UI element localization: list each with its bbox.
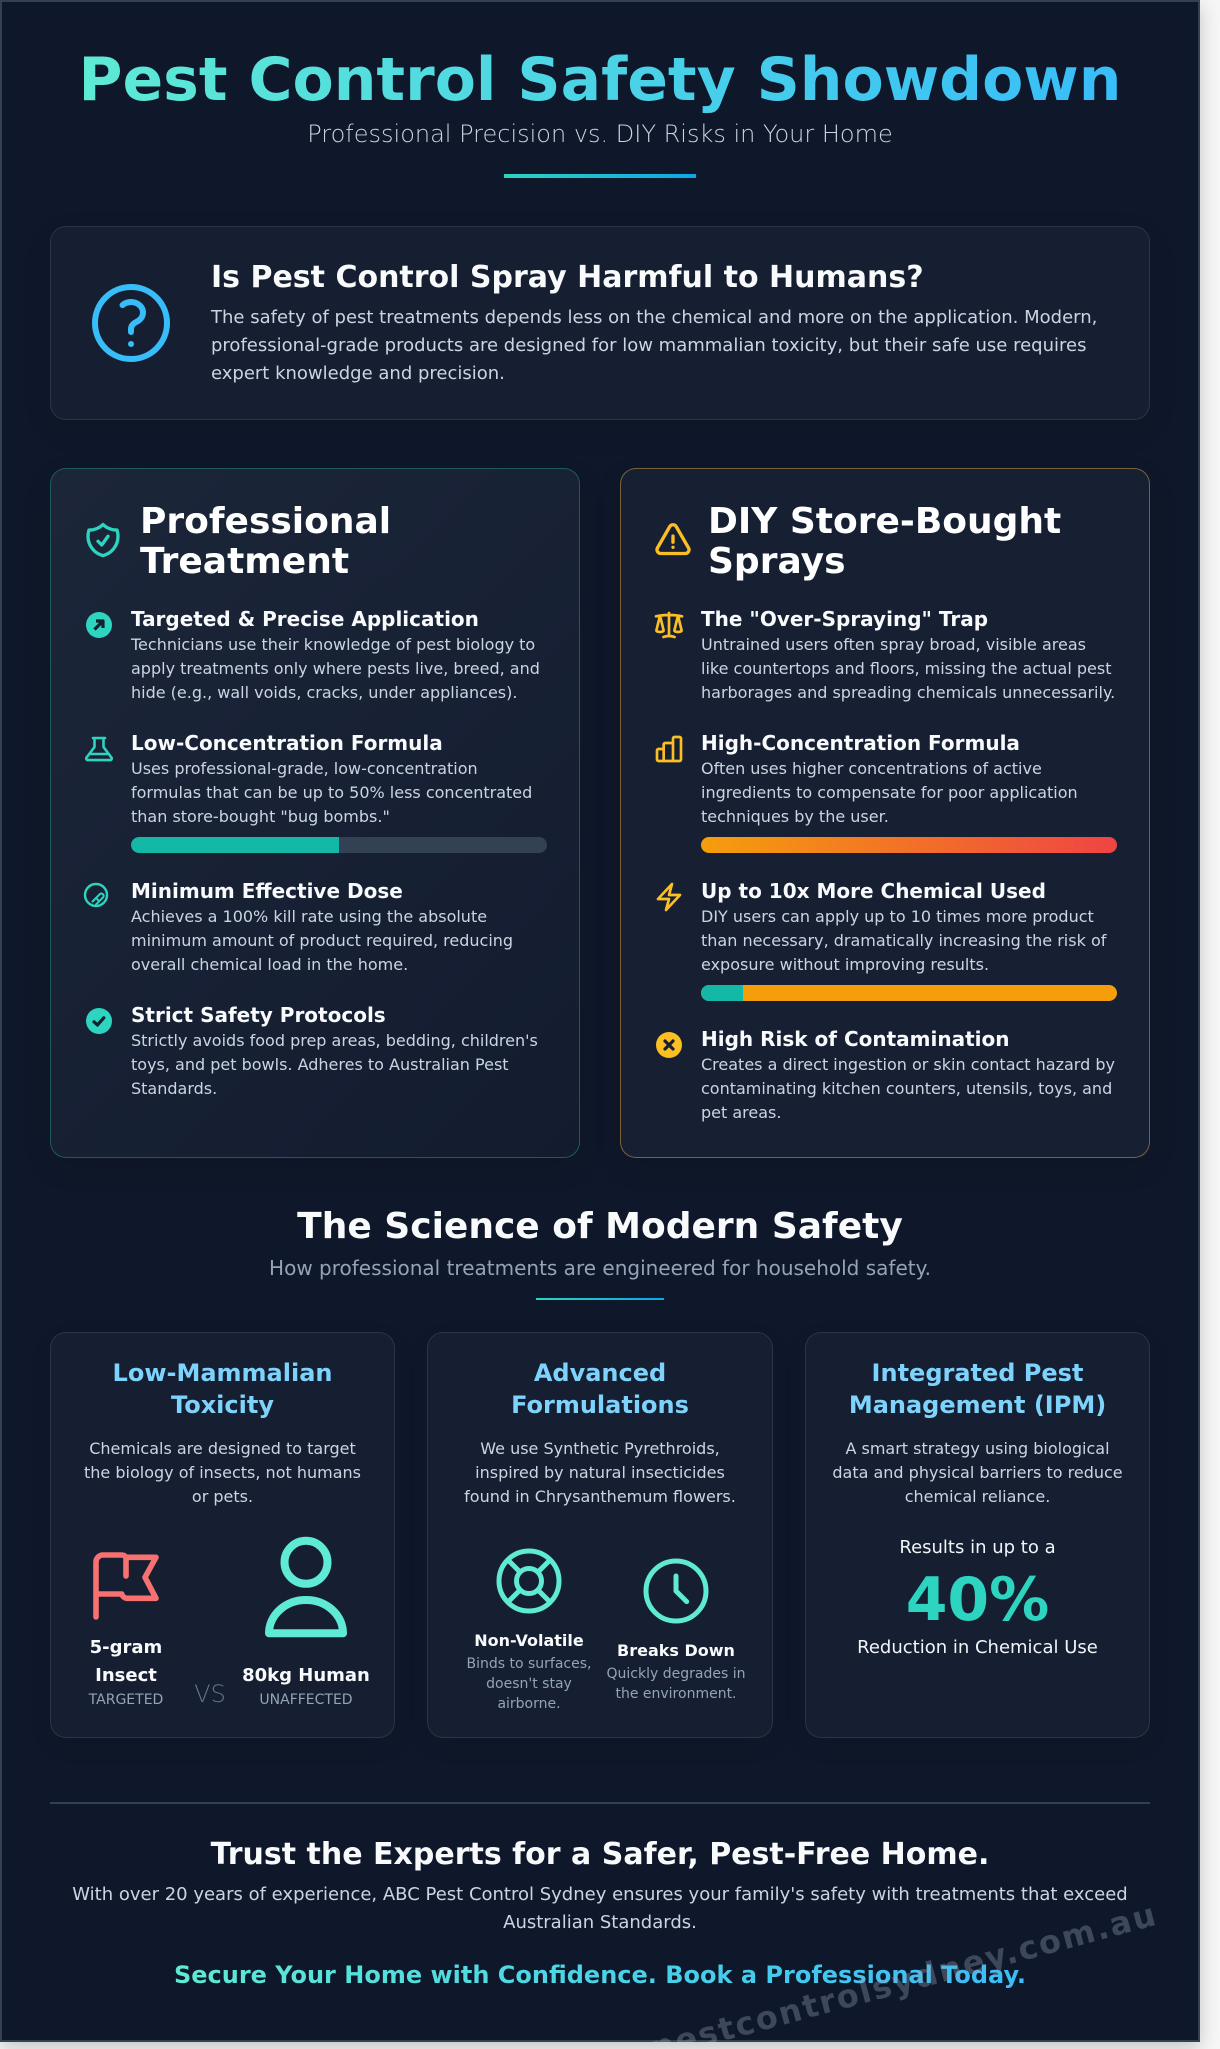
item text: Achieves a 100% kill rate using the absolute <box>131 907 487 926</box>
panel: advanced formulations <box>427 1332 773 1738</box>
item text <box>701 759 1078 826</box>
label: versus: VS <box>194 1680 226 1708</box>
item title: High-Concentration Formula <box>701 731 1020 755</box>
item: targeted application <box>86 607 540 702</box>
item text: DIY users can apply up to 10 times more product <box>701 907 1094 926</box>
text: breaks down <box>596 1664 756 1704</box>
card title: Advanced <box>534 1359 666 1387</box>
heading: DIY sprays: DIY Store-Bought <box>708 501 1061 542</box>
subtitle: Professional Precision vs. DIY Risks in Your Home <box>307 120 893 148</box>
item title: Targeted & Precise Application <box>131 607 479 631</box>
title: Pest Control Safety Showdown <box>79 45 1121 115</box>
item text: Standards. <box>131 1079 217 1098</box>
footer heading: Trust the Experts for a Safer, Pest-Free Home. <box>211 1837 989 1872</box>
item text: formulas that can be up to 50% less concentrated <box>131 783 532 802</box>
item text <box>131 1031 538 1098</box>
icon: dose <box>84 882 108 908</box>
item text <box>130 635 540 702</box>
item text: than necessary, dramatically increasing the risk of <box>701 931 1106 950</box>
icon: person <box>265 1536 347 1638</box>
item text <box>701 1055 1115 1122</box>
item text <box>701 635 1115 702</box>
card text: or pets. <box>192 1487 253 1506</box>
card title: Integrated Pest <box>872 1359 1083 1387</box>
text: non-volatile: airborne. <box>497 1696 561 1712</box>
item: 10x chemical <box>656 879 1117 1001</box>
text: non-volatile <box>466 1656 592 1712</box>
text: stat caption: Reduction in Chemical Use <box>857 1637 1098 1658</box>
item title: Up to 10x More Chemical Used <box>701 879 1046 903</box>
heading: professional treatment: Treatment <box>140 541 349 582</box>
item: safety protocols <box>86 1003 538 1098</box>
item title: Low-Concentration Formula <box>131 731 443 755</box>
text: harmful answer: expert knowledge and precision. <box>211 363 505 384</box>
card text: chemical reliance. <box>905 1487 1050 1506</box>
item text: Often uses higher concentrations of active <box>701 759 1042 778</box>
item text: contaminating kitchen counters, utensils, toys, and <box>701 1079 1112 1098</box>
label: insect <box>90 1637 162 1686</box>
label: non-volatile: Non-Volatile <box>474 1631 584 1650</box>
item text: techniques by the user. <box>701 807 889 826</box>
icon: bolt <box>656 882 682 912</box>
card text: the biology of insects, not humans <box>84 1463 361 1482</box>
card text: We use Synthetic Pyrethroids, <box>480 1439 720 1458</box>
caption: unaffected: UNAFFECTED <box>259 1692 353 1708</box>
text: non-volatile: doesn't stay <box>486 1676 572 1692</box>
footer text <box>0 1881 1200 1937</box>
text: results lead-in: Results in up to a <box>899 1537 1056 1558</box>
text: non-volatile: Binds to surfaces, <box>466 1656 592 1672</box>
item text: pet areas. <box>701 1103 781 1122</box>
card title: Toxicity <box>171 1391 274 1419</box>
item text: Strictly avoids food prep areas, bedding, children's <box>131 1031 538 1050</box>
heading: professional treatment: Professional <box>140 501 391 542</box>
card text: data and physical barriers to reduce <box>832 1463 1123 1482</box>
item text: apply treatments only where pests live, breed, and <box>131 659 540 678</box>
item text: Technicians use their knowledge of pest biology to <box>131 635 535 654</box>
card text <box>464 1439 736 1506</box>
icon: bar chart <box>656 736 682 762</box>
text: breaks down: the environment. <box>615 1686 737 1702</box>
card title: Low-Mammalian <box>113 1359 332 1387</box>
item text <box>131 759 532 826</box>
text: harmful answer: The safety of pest treatments depends less on the chemical and more on the application. Modern, <box>211 306 1097 328</box>
item text: hide (e.g., wall voids, cracks, under appliances). <box>131 683 517 702</box>
label: insect: Insect <box>95 1665 157 1686</box>
item text <box>131 907 513 974</box>
bar: 50 percent concentration <box>131 837 547 853</box>
item text: harborages and spreading chemicals unnecessarily. <box>701 683 1115 702</box>
item text: Uses professional-grade, low-concentration <box>131 759 478 778</box>
item text: like countertops and floors, missing the actual pest <box>701 659 1111 678</box>
caption: targeted: TARGETED <box>89 1692 163 1708</box>
heading: DIY sprays <box>708 501 1061 582</box>
item text: Untrained users often spray broad, visible areas <box>701 635 1086 654</box>
heading: DIY sprays: Sprays <box>708 541 846 582</box>
item text: ingredients to compensate for poor application <box>701 783 1078 802</box>
icon: x circle <box>656 1032 682 1058</box>
item title: Minimum Effective Dose <box>131 879 403 903</box>
item text: than store-bought "bug bombs." <box>131 807 390 826</box>
item text: exposure without improving results. <box>701 955 989 974</box>
item text: overall chemical load in the home. <box>131 955 408 974</box>
card text <box>805 1437 1150 1509</box>
item: contamination <box>656 1027 1115 1122</box>
card title <box>805 1357 1150 1421</box>
card text: Chemicals are designed to target <box>89 1439 356 1458</box>
item: low concentration <box>84 731 547 853</box>
panel: harmful question <box>50 226 1150 420</box>
icon: check circle <box>86 1008 112 1034</box>
subheading: science section: How professional treatments are engineered for household safety. <box>269 1256 931 1280</box>
item title: The "Over-Spraying" Trap <box>701 607 988 631</box>
card title <box>113 1359 332 1419</box>
icon: question mark circle <box>92 284 170 362</box>
item text: toys, and pet bowls. Adheres to Australian Pest <box>131 1055 509 1074</box>
heading: harmful question: Is Pest Control Spray Harmful to Humans? <box>211 260 924 295</box>
card text <box>84 1439 361 1506</box>
item: minimum dose <box>84 879 513 974</box>
stat: 40 percent: 40% <box>906 1565 1049 1635</box>
card title: Formulations <box>511 1391 689 1419</box>
icon: scale <box>654 612 684 638</box>
card title: Management (IPM) <box>849 1391 1106 1419</box>
item title: Strict Safety Protocols <box>131 1003 386 1027</box>
icon: clock <box>644 1558 708 1624</box>
label: insect: 5-gram <box>90 1637 162 1658</box>
footer text: Australian Standards. <box>503 1912 697 1933</box>
icon: arrow in circle <box>86 612 112 638</box>
item: over-spraying <box>654 607 1115 702</box>
icon: warning triangle <box>655 523 691 556</box>
item text: Creates a direct ingestion or skin contact hazard by <box>701 1055 1115 1074</box>
panel: DIY sprays <box>620 468 1150 1158</box>
card text: inspired by natural insecticides <box>475 1463 725 1482</box>
bar: 10 percent versus excess <box>701 985 1117 1001</box>
text: harmful answer: professional-grade products are designed for low mammalian toxicity, but their safe use requires <box>211 335 1086 356</box>
icon: flask <box>84 736 114 762</box>
text: harmful answer <box>210 306 1097 384</box>
label: human: 80kg Human <box>242 1665 370 1686</box>
card text: found in Chrysanthemum flowers. <box>464 1487 736 1506</box>
card title <box>511 1359 689 1419</box>
text: breaks down: Quickly degrades in <box>607 1666 745 1682</box>
call to action: Secure Your Home with Confidence. Book a Professional Today. <box>174 1961 1026 1989</box>
icon: flag <box>93 1552 159 1620</box>
bar: full high concentration <box>701 837 1117 853</box>
heading: science section: The Science of Modern Safety <box>297 1206 903 1247</box>
heading: professional treatment <box>140 501 391 582</box>
icon: shield check <box>86 522 120 558</box>
footer text: With over 20 years of experience, ABC Pest Control Sydney ensures your family's safety with treatments that exceed <box>72 1884 1128 1905</box>
icon: lifebuoy <box>496 1548 562 1614</box>
panel: professional treatment <box>50 468 580 1158</box>
item title: High Risk of Contamination <box>701 1027 1009 1051</box>
panel: integrated pest management <box>805 1332 1150 1738</box>
panel: low-mammalian toxicity <box>50 1332 395 1738</box>
item text <box>701 907 1107 974</box>
label: breaks down: Breaks Down <box>617 1641 735 1660</box>
item text: minimum amount of product required, reducing <box>131 931 513 950</box>
card text: A smart strategy using biological <box>845 1439 1110 1458</box>
item: high concentration <box>656 731 1117 853</box>
